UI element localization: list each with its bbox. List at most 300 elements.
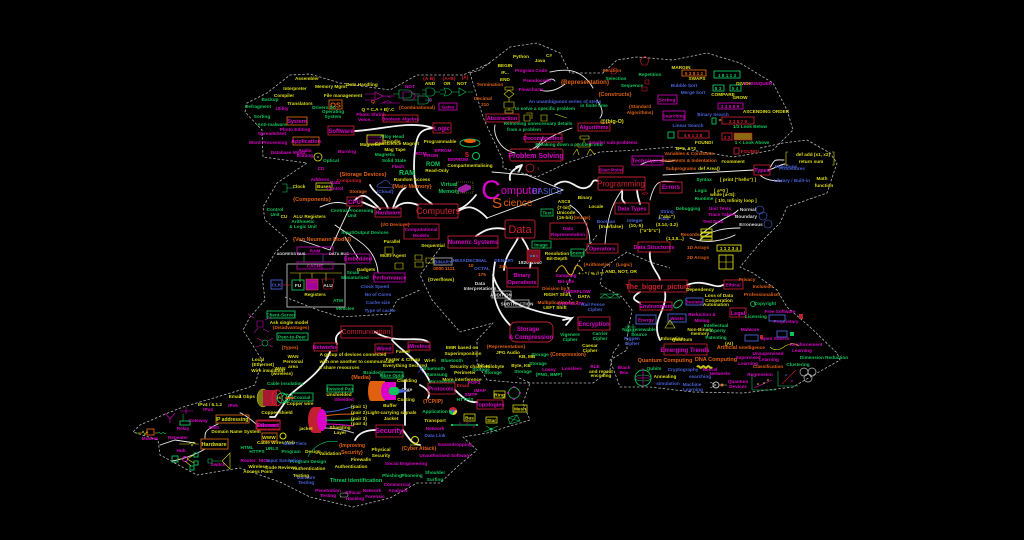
icons: network topology nodes	[248, 314, 273, 347]
compression and encryption notes: Lossless	[562, 366, 582, 371]
panel: CPU components and von Neumann architecture: Type of cache	[365, 308, 396, 313]
panel: security: Phishing	[382, 473, 402, 478]
panel: programming: {3.14,-3.2}	[656, 222, 678, 227]
diagram: von Neumann architecture: ALU	[323, 283, 333, 288]
box: Ethernet: Ethernet	[257, 423, 279, 429]
box: Techniques: Techniques	[632, 158, 662, 164]
panel: hardware and memory: Read-Only	[425, 168, 449, 173]
panel: hardware and memory	[314, 134, 493, 218]
panel: data: Bit-rate	[558, 279, 575, 284]
compression and encryption notes: Byte, KB	[511, 363, 531, 368]
panel: hardware and memory: Compartmentalising	[447, 163, 493, 168]
panel: problem solving: C#	[546, 53, 552, 58]
label: von Neumann Model: {Von Neumann Model}	[293, 237, 352, 243]
diagram: von Neumann architecture: CACHE	[307, 264, 323, 268]
panel: hardware and memory: Burning	[338, 149, 356, 154]
box: Data Representation: Representation	[551, 232, 585, 237]
panel: security: Hacking	[346, 496, 364, 501]
panel: programming: Logic	[695, 188, 708, 193]
diagram: von Neumann architecture: DATA BUS	[329, 251, 349, 256]
label: Storage Devices: {Storage Devices}	[339, 172, 387, 178]
box: Legal: Legal	[731, 311, 746, 317]
diagram: merge sort array: DIVIDE	[736, 81, 752, 86]
panel: the bigger picture: Qubits	[647, 366, 662, 371]
box: Software: Software	[328, 129, 354, 135]
compression and encryption notes: Lossy	[542, 367, 556, 372]
box: Topologies: Topologies	[476, 402, 504, 408]
diagram: von Neumann architecture: ADDRESS BUS	[276, 251, 306, 256]
panel: software and operating systems: File management	[324, 93, 363, 98]
panel: the bigger picture: Malware	[741, 327, 760, 332]
panel: protocols and topologies: IMAP	[474, 388, 486, 393]
panel: communication and networks: Ask single model	[270, 320, 308, 325]
panel: CPU components and von Neumann architecture: ATM	[333, 298, 343, 303]
label: TCP/IP: {TCP/IP}	[423, 399, 443, 405]
label: Standard Algorithms: {Standard	[629, 104, 651, 109]
panel: programming: Math	[817, 176, 828, 181]
panel: internet hardware	[136, 394, 295, 474]
panel: software and operating systems: {A·B}	[423, 76, 435, 81]
panel: communication and networks: Unshielded	[326, 392, 352, 397]
panel: CPU components and von Neumann architecture: Arithmetic	[291, 219, 315, 224]
panel: security: Penetration	[315, 488, 341, 493]
panel: software and operating systems: AND	[425, 81, 436, 86]
panel: programming: while [a<5]:	[709, 192, 736, 197]
main white connector arrows	[160, 70, 785, 461]
box: Performance: Performance	[373, 276, 406, 282]
panel: communication and networks: Perimeter	[454, 370, 476, 375]
box: Encryption: Encryption	[578, 322, 610, 328]
box: Algorithms: Algorithms	[579, 125, 609, 131]
panel: communication and networks: 1 Gbps	[265, 395, 281, 400]
panel: problem solving: Linear Search	[672, 123, 704, 128]
box: OS: OS	[330, 100, 341, 110]
compression and encryption notes: Caesar	[582, 343, 598, 348]
icon: virtual memory chip: Virtual	[440, 182, 458, 188]
panel: the bigger picture: Machine	[683, 382, 702, 387]
panel: internet hardware: Repeater	[168, 435, 188, 440]
panel: programming: {"abc"}	[659, 214, 675, 219]
panel: CPU components and von Neumann architecture: {I/O Devices}	[381, 222, 410, 227]
panel: programming: Syntax	[696, 177, 712, 182]
panel: internet hardware: Email	[229, 394, 241, 399]
panel: software and operating systems: Translators	[287, 101, 313, 106]
label: Constructs: {Constructs}	[598, 92, 633, 98]
panel: security: Program Design	[290, 459, 326, 464]
label: Improving Security: {Improving	[339, 443, 365, 449]
panel: problem solving: Smaller sub-problems	[588, 140, 638, 145]
panel: internet hardware: URLS	[266, 446, 278, 451]
label: numeric bases: BINARY	[434, 260, 453, 264]
panel: the bigger picture: Professionalism	[744, 292, 780, 297]
panel: security	[265, 425, 472, 501]
panel: CPU components and von Neumann architecture: Clock	[293, 184, 306, 189]
panel: hardware and memory: Magnetic	[360, 142, 381, 147]
compression and encryption notes: Storage	[484, 370, 502, 375]
compression and encryption notes: Vigenere	[560, 332, 580, 337]
panel: security: Forensic	[365, 494, 385, 499]
box: Protocols: Protocols	[428, 386, 454, 392]
panel: problem solving: @(big-O)	[600, 119, 624, 125]
licence badges	[745, 314, 803, 341]
panel: software and operating systems: Memory Mgmt	[315, 84, 347, 89]
panel: problem solving	[474, 53, 790, 172]
box: Algorithms	[578, 123, 610, 131]
panel: internet hardware: HTTPS	[249, 449, 265, 454]
panel: communication and networks: Security channels	[450, 364, 490, 369]
panel: security: Validation	[319, 451, 341, 456]
panel: the bigger picture: Learning	[759, 357, 779, 362]
panel: programming: Records	[681, 232, 700, 237]
box: Twisted Pair: Twisted Pair	[326, 386, 354, 392]
panel: communication and networks: {pair 3}	[351, 416, 367, 421]
panel: communication and networks: Everything Secured	[383, 363, 427, 368]
diagram: von Neumann architecture: CLK	[272, 282, 282, 288]
panel: problem solving: Java	[535, 58, 546, 63]
box: Storage and Compression: Storage	[517, 327, 540, 333]
diagram: merge sort array: 3 4 5 8 9	[721, 104, 740, 109]
box: Waste: Waste	[670, 316, 684, 321]
panel: programming: def add (x1, x2)	[796, 152, 831, 157]
icons: AND OR NOT gates	[422, 88, 473, 96]
panel: problem solving: IF...	[501, 70, 509, 75]
box: Numeric Systems	[448, 236, 499, 248]
panel: communication and networks	[248, 311, 490, 435]
panel: CPU components and von Neumann architecture: CU	[281, 214, 288, 219]
panel: data: Division by 2	[542, 286, 570, 291]
box: Coaxial	[292, 393, 313, 401]
panel: communication and networks: Coating	[397, 397, 415, 402]
panel: programming: Unit Tests	[709, 206, 732, 211]
panel: communication and networks: Wire insulation	[251, 368, 285, 373]
panel: programming: Float	[658, 216, 670, 221]
panel: the bigger picture: Box	[620, 370, 629, 375]
box: Computational Models	[404, 224, 439, 239]
panel: problem solving: Bubble Sort	[671, 83, 698, 88]
panel: data: ASCII	[558, 199, 570, 204]
panel: internet hardware: 1 Gbps	[239, 394, 255, 399]
panel: communication and networks: Faster & Cheap	[386, 357, 420, 362]
panel: the bigger picture: DNA Computing	[695, 357, 737, 363]
panel: the bigger picture: Inclusion	[753, 284, 773, 289]
panel: hardware and memory: CD	[318, 166, 325, 171]
panel: data: + - * / % // **	[578, 271, 604, 276]
panel: hardware and memory: Programmable	[424, 139, 457, 144]
panel: data: {7-bit}	[557, 205, 571, 210]
panel: programming: 1D Arrays	[687, 245, 709, 250]
panel: programming: def Area()	[698, 166, 720, 171]
box: Data Structures: Data Structures	[634, 245, 674, 251]
box: Numeric Systems: Numeric Systems	[448, 240, 499, 246]
panel: CPU components and von Neumann architecture: Parallel	[384, 239, 400, 244]
panel: software and operating systems	[245, 74, 473, 158]
title: Computer Science: omputer	[501, 185, 542, 197]
panel: CPU components and von Neumann architecture: Registers	[304, 214, 326, 219]
diagram: binary search arrays: =	[719, 118, 722, 123]
panel: internet hardware: Wireless	[248, 464, 268, 469]
icon: DNA helix	[697, 366, 712, 368]
panel: programming: Functions	[775, 164, 798, 169]
icon: optical disc	[460, 139, 480, 160]
compression and encryption notes: Storage	[529, 361, 547, 366]
panel: communication and networks: Braided	[363, 370, 381, 375]
panel: the bigger picture: Non-renewable	[622, 327, 656, 332]
panel: the bigger picture: Source	[631, 332, 647, 337]
panel: communication and networks: Cladding	[397, 378, 417, 383]
panel: security: Security	[372, 453, 391, 458]
panel: the bigger picture: Non-Binary	[687, 327, 713, 332]
panel: the bigger picture: Proprietary	[773, 319, 799, 324]
box: Decomposition: Decomposition	[523, 136, 563, 142]
panel: communication and networks: WAN	[275, 366, 286, 371]
panel: programming	[597, 146, 834, 269]
panel: CPU components and von Neumann architecture	[267, 177, 445, 313]
panel: software and operating systems: Editing	[297, 153, 313, 158]
panel: programming: Library / Built-in	[774, 178, 810, 183]
panel: CPU components and von Neumann architecture: & Logic Unit	[289, 224, 317, 229]
panel: communication and networks: area	[288, 364, 298, 369]
box: Society: Society	[686, 300, 703, 304]
panel: CPU components and von Neumann architecture: No of Cores	[365, 292, 392, 297]
diagram: merge sort array: 1 8 1 1 3	[718, 73, 737, 78]
panel: communication and networks: Layer	[334, 430, 346, 435]
box: Internet: Internet	[258, 423, 278, 429]
box: Software	[328, 126, 354, 135]
panel: problem solving: 210	[481, 102, 489, 107]
panel: communication and networks: Light-carrying signals	[368, 410, 417, 415]
panel: communication and networks: WAN	[288, 354, 299, 359]
panel: problem solving: Selection	[606, 76, 627, 81]
panel: programming: Boolean	[597, 219, 615, 224]
panel: data: {Image}	[573, 215, 591, 220]
panel: communication and networks: Shielded	[334, 397, 354, 402]
diagram: logic gate chain	[365, 84, 432, 104]
icon: light bulb: !	[537, 166, 539, 171]
panel: problem solving: Sequence	[621, 83, 643, 88]
panel: software and operating systems: Defragment	[245, 104, 271, 109]
panel: software and operating systems: Sorting	[254, 114, 270, 119]
box: Ethical	[724, 280, 743, 289]
box: Computers: Computers	[416, 206, 461, 216]
diagram: binary search arrays: FOUND!	[695, 140, 714, 145]
icon: twisted pair cable	[308, 406, 354, 433]
icon: pixel grid	[527, 250, 540, 262]
title: Computer Science: S	[492, 195, 502, 212]
compression and encryption notes: RLE	[590, 364, 600, 369]
compression and encryption notes: Cipher	[583, 348, 598, 353]
panel: CPU components and von Neumann architecture: Address	[311, 177, 330, 182]
label: numeric bases: HEXADECIMAL	[453, 258, 487, 263]
topology: mesh: Mesh	[514, 406, 526, 412]
box: IP addressing: IP addressing	[216, 417, 248, 423]
panel: software and operating systems: OR	[443, 81, 451, 86]
box: Embedded: Embedded	[344, 256, 372, 262]
compression and encryption notes: Carrier	[592, 331, 608, 336]
panel: programming: #comment	[721, 159, 745, 164]
compression and encryption notes: Rail Fence	[581, 302, 605, 307]
panel: the bigger picture: Quantum	[728, 379, 748, 384]
panel: data: OVERFLOW	[557, 301, 585, 306]
panel: CPU components and von Neumann architecture: Unit	[270, 212, 280, 217]
box: Legal	[730, 308, 746, 317]
panel: software and operating systems: Photo Shrink	[356, 112, 386, 117]
panel: programming: {10,-5}	[629, 223, 643, 228]
box: Errors: Errors	[662, 185, 681, 191]
panel: communication and networks: EMR based on	[446, 345, 478, 350]
panel: programming: [ a=0 ]	[714, 188, 728, 193]
chart: regression scatter	[752, 375, 776, 390]
box: Hardware (network): Hardware	[201, 442, 227, 448]
box: Programming: Programming	[597, 180, 645, 188]
panel: software and operating systems: {A+B}	[442, 76, 456, 81]
label: RAM: RAM	[399, 170, 415, 177]
panel: software and operating systems: Database Mgmt	[271, 150, 306, 155]
label: Cloud	[377, 181, 394, 194]
panel: the bigger picture: Patenting	[705, 335, 727, 340]
compression and encryption notes: Pigpen	[624, 336, 640, 341]
panel: the bigger picture: Reinforcement	[790, 342, 823, 347]
panel: software and operating systems: Voice...	[358, 117, 374, 122]
panel: security: Authentication	[335, 464, 368, 469]
chart: clustering scatter	[778, 370, 798, 386]
panel: the bigger picture: searching	[689, 374, 711, 379]
compression and encryption notes: bit	[478, 363, 484, 368]
panel: problem solving: Algorithms}	[627, 110, 653, 115]
box: Ethical: Ethical	[725, 282, 741, 288]
panel: the bigger picture: {AI}	[725, 341, 733, 346]
panel: data: Locale	[589, 204, 604, 209]
panel: problem solving: from a problem	[507, 127, 541, 132]
diagram: binary search arrays	[668, 109, 790, 154]
panel: protocols and topologies	[422, 380, 527, 438]
panel: security: Malware	[297, 475, 316, 480]
label: Media: {Media}	[351, 375, 372, 381]
box: Text: Text	[542, 210, 552, 216]
box: The bigger picture	[626, 280, 691, 292]
compression and encryption notes: encoding	[591, 373, 612, 378]
panel: the bigger picture: Supervised	[735, 355, 761, 360]
panel: software and operating systems: Anti-malware	[257, 122, 287, 127]
icon: optical disc: $	[465, 152, 469, 159]
panel: the bigger picture: Learning	[792, 348, 812, 353]
panel: problem solving: Repetition	[639, 72, 662, 77]
box: Waste	[668, 314, 686, 322]
icon: sine wave	[556, 266, 583, 275]
panel: software and operating systems: Operating	[322, 109, 344, 114]
panel: programming: function	[815, 183, 833, 188]
panel: hardware and memory: PROM	[424, 153, 438, 158]
label: Main Memory: {Main Memory}	[392, 184, 433, 190]
box: Types	[754, 165, 770, 175]
panel: data: RIGHT Shift	[544, 292, 571, 297]
panel: programming: Boundary	[735, 214, 757, 219]
panel: problem solving: Pseudocode	[523, 78, 551, 83]
panel: security: Unauthorised Software	[419, 453, 471, 458]
box: Energy: Energy	[638, 318, 654, 322]
panel: the bigger picture: Quantum Computing	[638, 358, 692, 364]
panel: protocols and topologies: Application	[422, 409, 448, 414]
diagram: logic gate chain: NOT	[405, 84, 415, 89]
label: Cloud: {Cloud}	[377, 189, 394, 194]
panel: problem solving: An unambiguous series of steps	[529, 99, 602, 104]
diagram: von Neumann architecture	[271, 247, 349, 307]
box: Operators	[587, 244, 618, 253]
label: Cyber Attack: {Cyber Attack}	[402, 446, 436, 452]
panel: the bigger picture: Open Source	[760, 336, 790, 341]
box: Hardware: Hardware	[375, 210, 401, 216]
panel: the bigger picture: Quantum	[672, 337, 692, 342]
diagram: arrays: 1 1 2 3 4	[720, 246, 739, 251]
panel: the bigger picture: Free Software	[764, 309, 796, 314]
panel: hardware and memory: Conscience Magnet	[375, 141, 419, 146]
compression and encryption notes: Cipher	[563, 337, 578, 342]
panel: software and operating systems: Audio	[298, 148, 312, 153]
box: Data Types: Data Types	[618, 206, 646, 212]
icon: flowchart	[504, 87, 514, 113]
diagram: merge sort array: GROW	[732, 95, 748, 100]
panel: security: Network	[363, 488, 382, 493]
panel: internet hardware: Cable Wires Web	[257, 440, 295, 445]
panel: hardware and memory: Spindle	[384, 139, 401, 144]
panel: internet hardware: Switch	[210, 462, 226, 467]
panel: data: DATA	[578, 294, 591, 299]
icon: antenna	[418, 365, 424, 373]
diagram: merge sort array: 5 3 8 1 2	[685, 71, 704, 76]
panel: communication and networks: Bluetooth	[441, 358, 463, 363]
panel: programming: return sum	[799, 159, 823, 164]
box: Networks: Networks	[313, 345, 337, 351]
panel: programming: Erroneous	[739, 222, 763, 227]
panel: data: Sampling	[555, 273, 577, 278]
panel: software and operating systems: Interpreter	[283, 86, 307, 91]
panel: CPU components and von Neumann architecture: Unit	[347, 213, 357, 218]
panel: security: Eavesdropping	[438, 442, 472, 447]
box: Wired	[375, 344, 393, 353]
panel: communication and networks: Microwaves	[429, 379, 456, 384]
panel: internet hardware: Access Point	[243, 469, 273, 474]
panel: internet hardware: NICs	[259, 458, 270, 463]
panel: security: Code Reviews	[265, 465, 297, 470]
panel: programming: </>	[642, 191, 649, 196]
panel: the bigger picture: simulation	[656, 381, 680, 386]
box: Logic: Logic	[434, 126, 451, 132]
panel: problem solving: Breaking down a problem into	[535, 142, 603, 147]
panel: protocols and topologies: Email	[457, 383, 469, 388]
panel: software and operating systems: {Ā}	[461, 74, 469, 80]
compression and encryption notes	[472, 294, 640, 378]
panel: data: {Arithmetic}	[584, 262, 611, 267]
box: CPU	[347, 197, 362, 206]
panel: the bigger picture: Learning	[683, 387, 703, 392]
label: numeric bases: 245	[499, 264, 507, 269]
panel: problem solving: END	[500, 77, 511, 82]
panel: CPU components and von Neumann architecture: Buses	[317, 184, 331, 189]
panel: programming: B=5, A=2	[676, 146, 696, 151]
panel: hardware and memory: Flash	[392, 164, 404, 169]
diagram: merge sort array: COMPARE	[711, 92, 735, 97]
box: Sorting: Sorting	[659, 98, 675, 102]
box: Types: Types	[754, 168, 770, 174]
diagram: binary search arrays: 1 < Look Above	[735, 140, 770, 145]
diagram: binary search arrays: ASCENDING ORDER	[743, 109, 790, 114]
box: Data Representation	[550, 223, 587, 239]
label: numeric bases: 10	[468, 263, 474, 268]
panel: the bigger picture: Privacy	[739, 277, 756, 282]
box: Hardware	[375, 208, 401, 217]
panel: the bigger picture: Reduction &	[688, 312, 716, 317]
title: Computer Science: C	[481, 175, 501, 205]
panel: the bigger picture: Cryptography	[668, 367, 699, 372]
